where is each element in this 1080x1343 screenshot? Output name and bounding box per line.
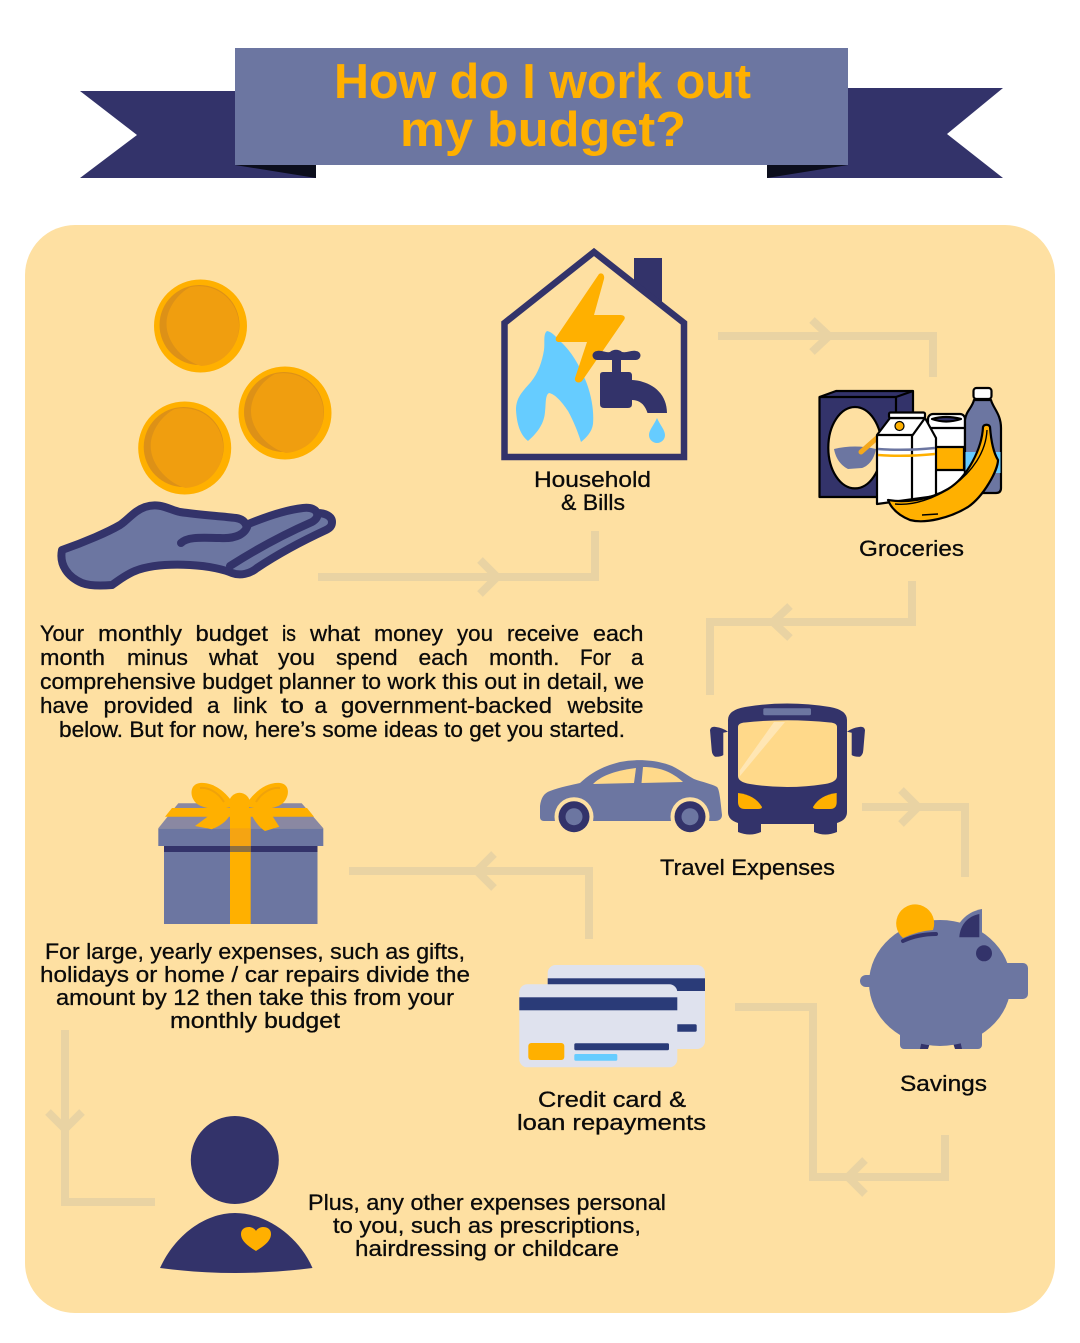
text block: yearly expenses: monthly budget xyxy=(170,1008,341,1033)
text block: monthly budget explanation: budget xyxy=(196,621,269,646)
text block: monthly budget explanation xyxy=(40,621,644,742)
text block: monthly budget explanation: a xyxy=(314,693,327,718)
text block: monthly budget explanation: you xyxy=(457,621,493,646)
arrow: travel to savings xyxy=(862,790,965,877)
text block: monthly budget explanation: each xyxy=(418,645,468,670)
text block: monthly budget explanation: each xyxy=(593,621,644,646)
label: credit card and loan repayments xyxy=(517,1087,706,1135)
panel: budget background xyxy=(25,225,1055,1313)
text block: monthly budget explanation: what xyxy=(208,645,259,670)
text block: personal expenses: to you, such as prescriptions, xyxy=(333,1213,641,1238)
title: How do I work out xyxy=(334,55,751,109)
text block: monthly budget explanation: have xyxy=(40,693,89,718)
text block: yearly expenses: amount by 12 then take this from your xyxy=(56,985,455,1010)
text block: monthly budget explanation: receive xyxy=(507,621,579,646)
arrow: savings to credit cards xyxy=(735,1007,945,1194)
icon: gift box xyxy=(158,783,323,924)
arrow: groceries to travel xyxy=(710,581,912,695)
icon: coins xyxy=(138,280,332,494)
title banner xyxy=(80,48,1003,178)
text block: yearly expenses: holidays or home / car repairs divide the xyxy=(40,962,470,987)
title: my budget? xyxy=(400,103,686,157)
text block: yearly expenses: For large, yearly expenses, such as gifts, xyxy=(45,939,465,964)
text block: monthly budget explanation: minus xyxy=(127,645,188,670)
text block: monthly budget explanation: For xyxy=(580,645,611,670)
text block: monthly budget explanation: website xyxy=(567,693,644,718)
arrow: income to household xyxy=(318,531,595,594)
text block: monthly budget explanation: link xyxy=(233,693,268,718)
label: savings: Savings xyxy=(900,1071,987,1096)
text block: monthly budget explanation: a xyxy=(207,693,220,718)
text block: personal expenses: Plus, any other expenses personal xyxy=(308,1190,666,1215)
text block: monthly budget explanation: provided xyxy=(104,693,193,718)
text block: personal expenses: hairdressing or childcare xyxy=(355,1236,619,1261)
text block: monthly budget explanation: Your xyxy=(40,621,84,646)
icon: house with energy and water xyxy=(504,252,684,457)
text block: monthly budget explanation: government-backed xyxy=(341,693,552,718)
text block: monthly budget explanation: you xyxy=(278,645,315,670)
text block: monthly budget explanation: a xyxy=(631,645,644,670)
arrow: credit cards to gift xyxy=(349,854,589,939)
text block: monthly budget explanation: comprehensive budget planner to work this out in detail, we xyxy=(40,669,644,694)
text block: monthly budget explanation: month xyxy=(40,645,105,670)
label: credit card and loan repayments: loan repayments xyxy=(517,1110,706,1135)
arrow: gift to person xyxy=(48,1030,155,1202)
label: credit card and loan repayments: Credit card & xyxy=(538,1087,686,1112)
icon: credit cards xyxy=(519,965,705,1067)
label: groceries: Groceries xyxy=(859,536,964,561)
icon: bus xyxy=(710,704,865,834)
text block: yearly expenses xyxy=(40,939,470,1033)
text block: monthly budget explanation: spend xyxy=(336,645,398,670)
text block: monthly budget explanation: what xyxy=(309,621,361,646)
text block: monthly budget explanation: to xyxy=(281,693,304,718)
label: travel expenses: Travel Expenses xyxy=(660,855,835,880)
text block: monthly budget explanation: month. xyxy=(489,645,560,670)
text block: personal expenses xyxy=(308,1190,666,1261)
label: household and bills xyxy=(534,467,651,515)
icon: person with heart xyxy=(160,1116,312,1273)
arrow: household to groceries xyxy=(718,320,933,377)
label: household and bills: Household xyxy=(534,467,651,492)
text block: monthly budget explanation: is xyxy=(282,621,296,646)
label: household and bills: & Bills xyxy=(561,490,625,515)
text block: monthly budget explanation: monthly xyxy=(98,621,183,646)
icon: open hand xyxy=(61,505,332,586)
text block: monthly budget explanation: below. But for now, here’s some ideas to get you started. xyxy=(59,717,625,742)
icon: car xyxy=(540,760,722,836)
text block: monthly budget explanation: money xyxy=(374,621,444,646)
icon: piggy bank xyxy=(860,904,1028,1049)
icon: groceries xyxy=(820,388,1001,521)
title xyxy=(334,55,751,157)
